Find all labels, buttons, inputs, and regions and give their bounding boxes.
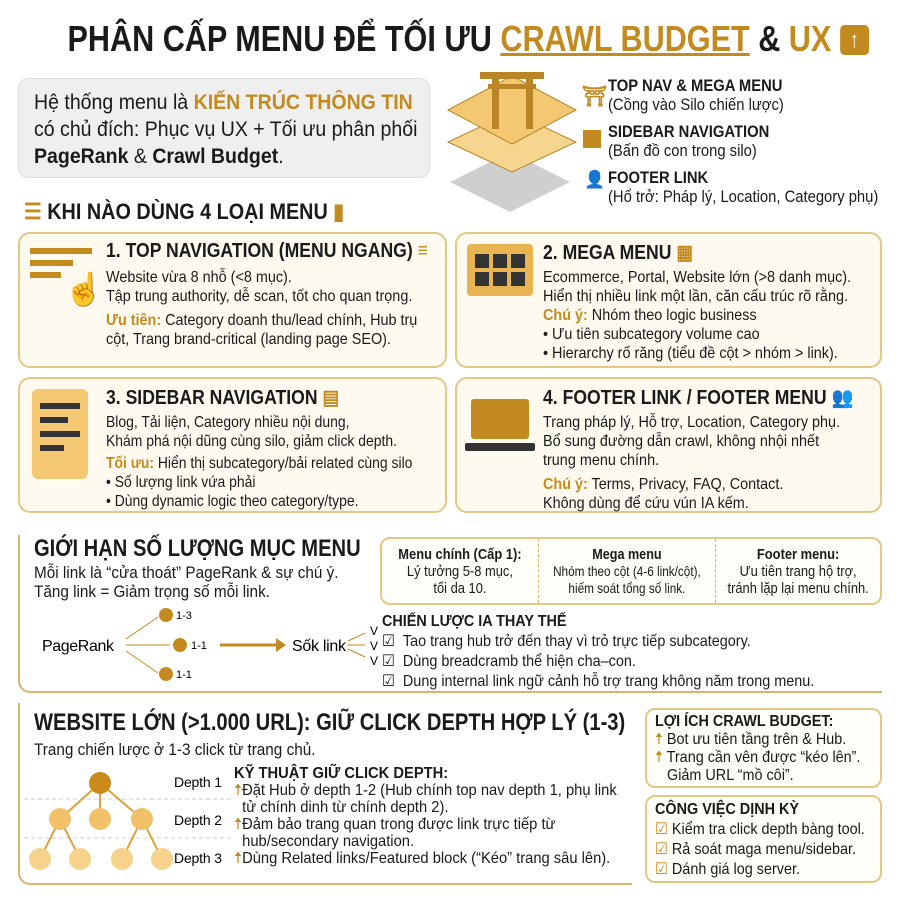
card text: Bổ sung đường dẫn crawl, không nhội nhết [543,433,819,450]
text: ↑ [850,27,859,52]
heading: GIỚI HẠN SỐ LƯỢNG MỤC MENU [34,535,361,562]
diagram: pagerank split: PageRank [42,638,115,655]
strategy list: ☑ Dùng breadcramb thể hiện cha–con. [382,653,636,670]
technique list: 🠅Đảm bảo trang quan trong được link trực tiếp từ [234,816,555,833]
table: menu limits: Nhóm theo cột (4-6 link/cột), [553,563,701,579]
table: menu limits: Menu chính (Cấp 1): [398,546,522,563]
panel: top navigation [18,232,447,368]
text: Hệ thống menu là KIẾN TRÚC THÔNG TIN [34,91,413,114]
table: menu limits: Footer menu: [757,546,839,563]
text: Mỗi link là “cửa thoát” PageRank & sự chú ý. [34,563,339,582]
card text: Website vừa 8 nhỗ (<8 mục). [106,269,292,286]
text: CÔNG VIỆC DỊNH KỲ [655,801,799,818]
text [34,563,339,601]
text: ☑ Dánh giá log server. [655,861,800,878]
card text: Ecommerce, Portal, Website lớn (>8 danh mục). [543,269,851,286]
card text [543,269,851,362]
panel: limit menu items [18,535,882,693]
panel: footer [455,377,882,513]
technique list: 🠅Dùng Related links/Featured block (“Kéo” trang sâu lên). [234,850,610,867]
card text: Tập trung authority, dễ scan, tốt cho quan trọng. [106,288,412,305]
card title: 3. SIDEBAR NAVIGATION ▤ [106,387,339,409]
text: Giảm URL “mồ côi”. [667,767,794,784]
text: PageRank & Crawl Budget. [34,145,284,168]
diagram: pagerank split: 1-3 [176,610,192,622]
table: menu limits [380,537,882,605]
card text: • Dùng dynamic logic theo category/type. [106,493,358,510]
diagram: pagerank split: 1-1 [176,669,192,681]
icon: gate: ⛩ [582,86,607,108]
panel: periodic tasks [645,795,882,883]
diagram: pagerank split [42,608,378,681]
label: footer: FOOTER LINK [608,168,708,187]
table: menu limits: Mega menu [592,546,661,563]
panel: crawl budget benefits [645,708,882,788]
card text: • Hierarchy rố răng (tiểu đề cột > nhóm > link). [543,345,838,362]
label: top nav: (Cồng vào Silo chiến lược) [608,95,784,114]
card text: trung menu chính. [543,452,659,469]
tree diagram: Depth 1 [174,774,222,790]
card text [543,413,840,512]
card text: cột, Trang brand-critical (landing page SEO). [106,331,391,348]
label: footer: (Hổ trở: Pháp lý, Location, Category phụ) [608,187,878,206]
card text: Khám phá nội dũng cùng silo, giảm click depth. [106,433,397,450]
diagram: pagerank split: V [370,624,378,638]
text: có chủ đích: Phục vụ UX + Tối ưu phân phối [34,118,417,141]
card title: 2. MEGA MENU ▦ [543,242,693,264]
tree diagram: Depth 2 [174,812,222,828]
label: sidebar: (Bấn đồ con trong silo) [608,141,757,160]
subtext: Trang chiến lược ở 1-3 click từ trang chủ. [34,740,315,759]
card text: Không dùng để cứu vún IA kếm. [543,495,749,512]
label: top nav [608,76,784,114]
table: menu limits: tránh lặp lại menu chính. [727,580,869,597]
label: footer [608,168,878,206]
card text: Blog, Tải liện, Category nhiều nội dung, [106,414,350,431]
strategy list: ☑ Dung internal link ngữ cảnh hỗ trợ trang không năm trong menu. [382,673,814,690]
icon: hand [30,248,104,307]
tree diagram: Depth 3 [174,850,222,866]
label: sidebar [608,122,769,160]
diagram: pagerank split: V [370,654,378,668]
text: 🠅 Trang cần vên được “kéo lên”. [655,749,860,766]
diagram: pagerank split: Sốk link [292,638,347,655]
panel: sidebar [18,377,447,513]
heading: WEBSITE LỚN (>1.000 URL): GIỮ CLICK DEPTH HỢP LÝ (1-3) [34,709,625,736]
icon: grid [467,244,533,296]
table: menu limits: Ưu tiên trang hộ trợ, [739,563,856,580]
diagram: pagerank split: 1-1 [191,640,207,652]
label: sidebar: SIDEBAR NAVIGATION [608,122,769,141]
icon: laptop [465,399,535,451]
card text: Trang pháp lý, Hỗ trợ, Location, Category phụ. [543,414,840,431]
strategy list [382,612,814,690]
technique list: tử chính dinh từ chính depth 2). [242,799,448,816]
icon: person: 👤 [584,170,605,189]
illustration: layered menu [447,72,577,212]
technique list [234,764,617,867]
table: menu limits: tối da 10. [433,580,486,597]
text: 🠅 Bot ưu tiên tầng trên & Hub. [655,731,846,748]
card title: 4. FOOTER LINK / FOOTER MENU 👥 [543,387,853,409]
panel: mega menu [455,232,882,368]
text: ☑ Rả soát maga menu/sidebar. [655,841,856,858]
technique list: 🠅Đặt Hub ở depth 1-2 (Hub chính top nav depth 1, phụ link [234,782,617,799]
technique list: hub/secondary navigation. [242,833,414,850]
technique list: KỸ THUẬT GIỮ CLICK DEPTH: [234,765,448,782]
intro text block [18,78,430,178]
icon: sidebar [32,389,88,479]
text: LỢI ÍCH CRAWL BUDGET: [655,713,833,730]
panel: large website [18,703,632,885]
card text [106,414,412,510]
card text: Hiển thị nhiều link một lần, căn cấu trúc rõ rằng. [543,288,848,305]
strategy list: CHIẾN LƯỢC IA THAY THẾ [382,613,567,630]
table: menu limits: Lý tưởng 5-8 mục, [407,563,513,580]
card text: • Số lượng link vứa phải [106,474,255,491]
card title: 1. TOP NAVIGATION (MENU NGANG) ≡ [106,240,428,262]
card text: Chú ý: Terms, Privacy, FAQ, Contact. [543,476,783,493]
label: top nav: TOP NAV & MEGA MENU [608,76,782,95]
text: Tăng link = Giảm trọng số mỗi link. [34,582,270,601]
card text: • Ưu tiên subcategory volume cao [543,326,760,343]
card text: Ưu tiên: Category doanh thu/lead chính, Hub trụ [106,312,417,329]
card text [106,268,417,348]
section heading: ☰ KHI NÀO DÙNG 4 LOẠI MENU ▮ [24,199,344,224]
tree diagram [24,772,231,870]
card text: Tối ưu: Hiển thị subcategory/bải related cùng silo [106,455,412,472]
table: menu limits: hiếm soát tổng số link. [568,580,685,596]
icon: hand: ☝ [64,271,104,307]
diagram: pagerank split: V [370,639,378,653]
card text: Chú ý: Nhóm theo logic business [543,307,757,324]
icon: map [583,130,601,148]
title: PHÂN CẤP MENU ĐỂ TỐI ƯU CRAWL BUDGET & UX [68,18,831,59]
strategy list: ☑ Tao trang hub trở đến thay vì trỏ trực tiếp subcategory. [382,633,751,650]
text: ☑ Kiểm tra click depth bàng tool. [655,821,865,838]
